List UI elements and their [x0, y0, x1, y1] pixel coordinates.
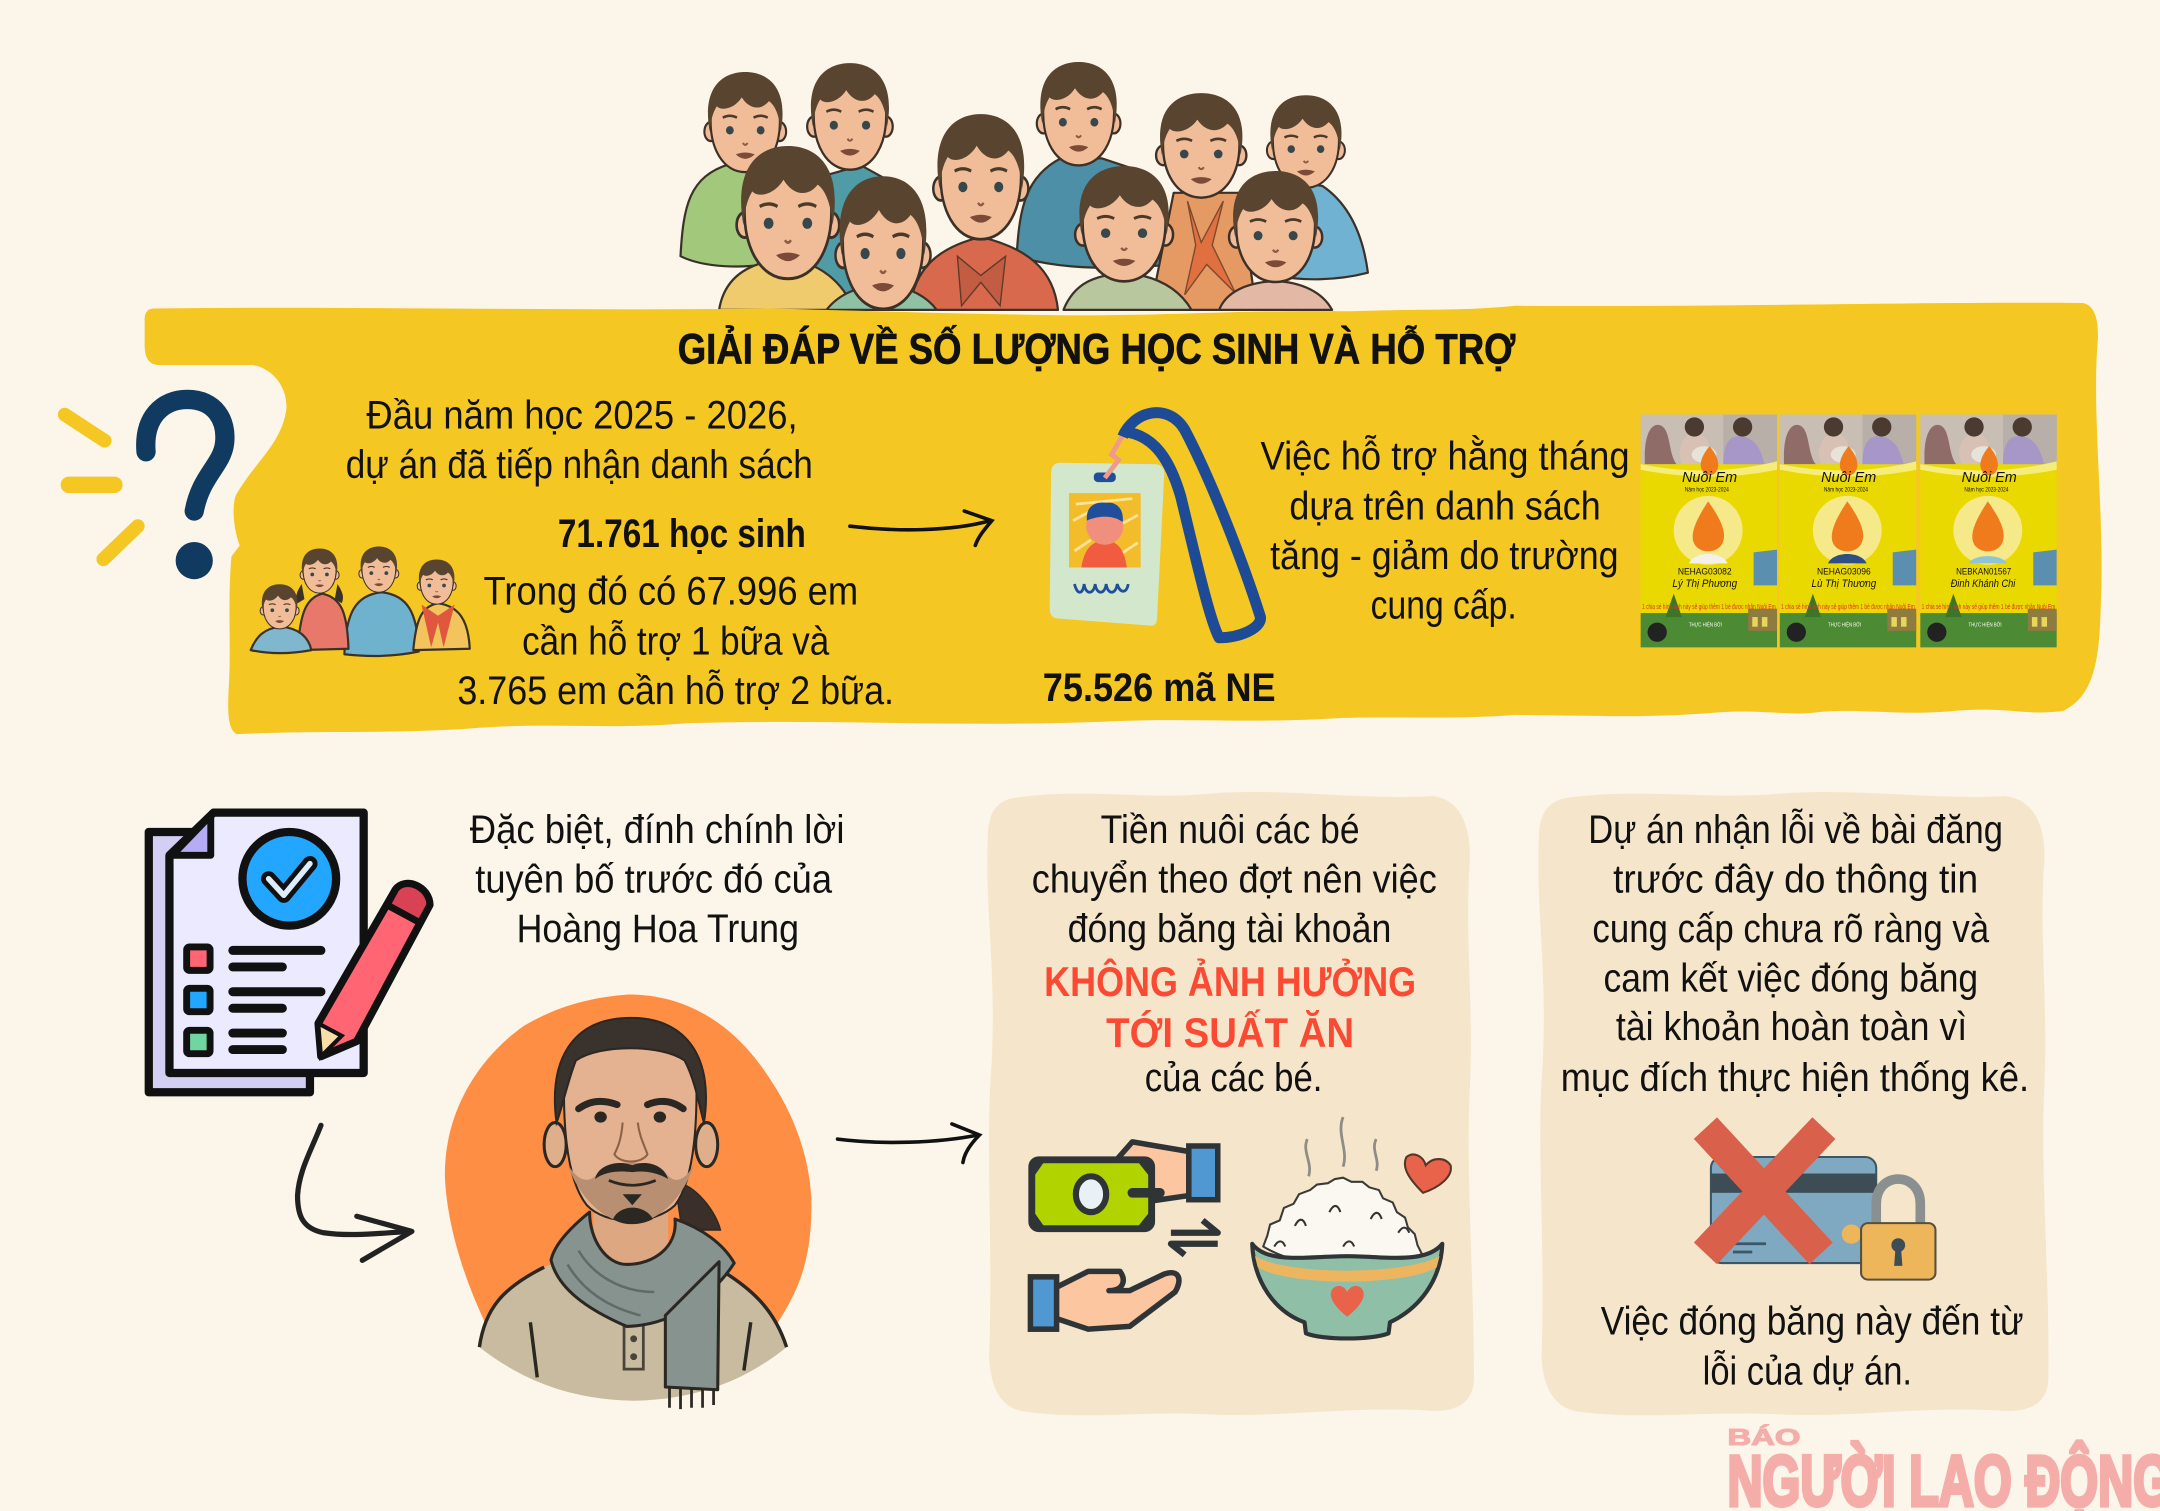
icon: ID badge with lanyard	[1050, 413, 1261, 638]
text block: monthly support: tăng - giảm do trường	[1270, 534, 1619, 578]
text block: monthly support: dựa trên danh sách	[1289, 484, 1601, 528]
arrow: document to portrait	[298, 1125, 412, 1260]
card 2: Năm học 2023-2024	[1824, 487, 1868, 494]
portrait: Hoàng Hoa Trung	[445, 994, 811, 1409]
text block: school year intro: Đầu năm học 2025 - 2026,	[366, 393, 798, 437]
panel: project apology: trước đây do thông tin	[1613, 858, 1978, 902]
text block: correction note: tuyên bố trước đó của	[475, 858, 833, 902]
icon: checklist document with pencil	[149, 813, 430, 1092]
icon: money changing hands	[1030, 1142, 1218, 1329]
text block: monthly support	[1260, 434, 1630, 627]
card 1: Nuôi Em	[1682, 469, 1737, 486]
callout: no impact on meals: KHÔNG ẢNH HƯỞNG	[1044, 959, 1416, 1005]
callout: no impact on meals	[1044, 959, 1416, 1056]
key number: students: 71.761 học sinh	[558, 512, 806, 556]
card 1: Lý Thị Phương	[1672, 578, 1738, 590]
text block: meal support breakdown: Trong đó có 67.996 em	[484, 570, 858, 614]
card 1: NEHAG03082	[1678, 566, 1732, 577]
image strip: three sponsorship cards	[1641, 415, 2057, 647]
card 1: 1 chia sẻ hình ảnh này sẽ giúp thêm 1 bé được nhận Nuôi Em	[1642, 604, 1776, 611]
panel: project apology: mục đích thực hiện thống kê.	[1561, 1056, 2029, 1100]
card 2: THỰC HIỆN BỞI	[1828, 621, 1861, 629]
illustration: four small children	[251, 547, 470, 656]
panel: meal money explanation	[987, 792, 1474, 1415]
card 1	[1641, 415, 1777, 647]
callout: no impact on meals: TỚI SUẤT ĂN	[1106, 1010, 1354, 1056]
panel: project apology: Việc đóng băng này đến từ	[1601, 1300, 2024, 1344]
arrow: portrait to panel	[838, 1124, 979, 1163]
watermark: newspaper logo: BÁO	[1727, 1423, 1800, 1450]
text block: school year intro	[346, 393, 813, 487]
card 3: Năm học 2023-2024	[1964, 487, 2009, 494]
panel: project apology: lỗi của dự án.	[1703, 1348, 1912, 1393]
card 1: THỰC HIỆN BỞI	[1689, 621, 1722, 629]
text block: monthly support: cung cấp.	[1371, 583, 1517, 627]
card 3	[1920, 415, 2057, 647]
key number: NE codes: 75.526 mã NE	[1043, 666, 1276, 710]
card 3: THỰC HIỆN BỞI	[1969, 621, 2002, 629]
text block: meal support breakdown	[457, 570, 894, 713]
text block: correction note: Đặc biệt, đính chính lời	[470, 808, 844, 852]
text block: monthly support: Việc hỗ trợ hằng tháng	[1260, 434, 1630, 479]
illustration: group of ten schoolchildren	[681, 62, 1368, 310]
text block: school year intro: dự án đã tiếp nhận danh sách	[346, 443, 813, 487]
panel: project apology: cam kết việc đóng băng	[1603, 957, 1978, 1001]
card 3: Đinh Khánh Chi	[1951, 578, 2016, 590]
panel: project apology	[1538, 792, 2049, 1415]
panel: yellow summary banner	[145, 303, 2102, 734]
panel: meal money explanation: chuyển theo đợt nên việc	[1032, 858, 1437, 902]
panel: meal money explanation: Tiền nuôi các bé	[1101, 808, 1360, 852]
text block: correction note: Hoàng Hoa Trung	[517, 907, 799, 951]
card 1: Năm học 2023-2024	[1685, 487, 1729, 494]
heading: GIẢI ĐÁP VỀ SỐ LƯỢNG HỌC SINH VÀ HỖ TRỢ	[678, 325, 1516, 374]
card 2: 1 chia sẻ hình ảnh này sẽ giúp thêm 1 bé được nhận Nuôi Em	[1781, 604, 1915, 611]
card 3: Nuôi Em	[1962, 469, 2017, 486]
card 2: NEHAG03096	[1817, 566, 1871, 577]
panel: meal money explanation: đóng băng tài khoản	[1068, 907, 1391, 951]
icon: bowl of rice with heart	[1252, 1117, 1451, 1338]
card 3: 1 chia sẻ hình ảnh này sẽ giúp thêm 1 bé được nhận Nuôi Em	[1922, 604, 2055, 611]
card 2	[1780, 415, 1916, 647]
text block: meal support breakdown: cần hỗ trợ 1 bữa và	[522, 618, 830, 663]
card 3: NEBKAN01567	[1956, 566, 2011, 577]
panel: project apology: cung cấp chưa rõ ràng và	[1592, 907, 1990, 951]
icon: frozen card with lock and red cross	[1705, 1128, 1935, 1280]
panel: project apology: Dự án nhận lỗi về bài đăng	[1588, 807, 2003, 852]
text block: meal support breakdown: 3.765 em cần hỗ trợ 2 bữa.	[457, 668, 894, 713]
icon: question mark with rays	[65, 399, 225, 579]
panel: project apology: tài khoản hoàn toàn vì	[1616, 1005, 1967, 1049]
text block: correction note	[470, 808, 844, 951]
arrow: students to codes	[850, 511, 992, 545]
panel: meal money explanation: của các bé.	[1145, 1056, 1322, 1100]
card 2: Lù Thị Thương	[1811, 578, 1877, 590]
card 2: Nuôi Em	[1821, 469, 1876, 486]
